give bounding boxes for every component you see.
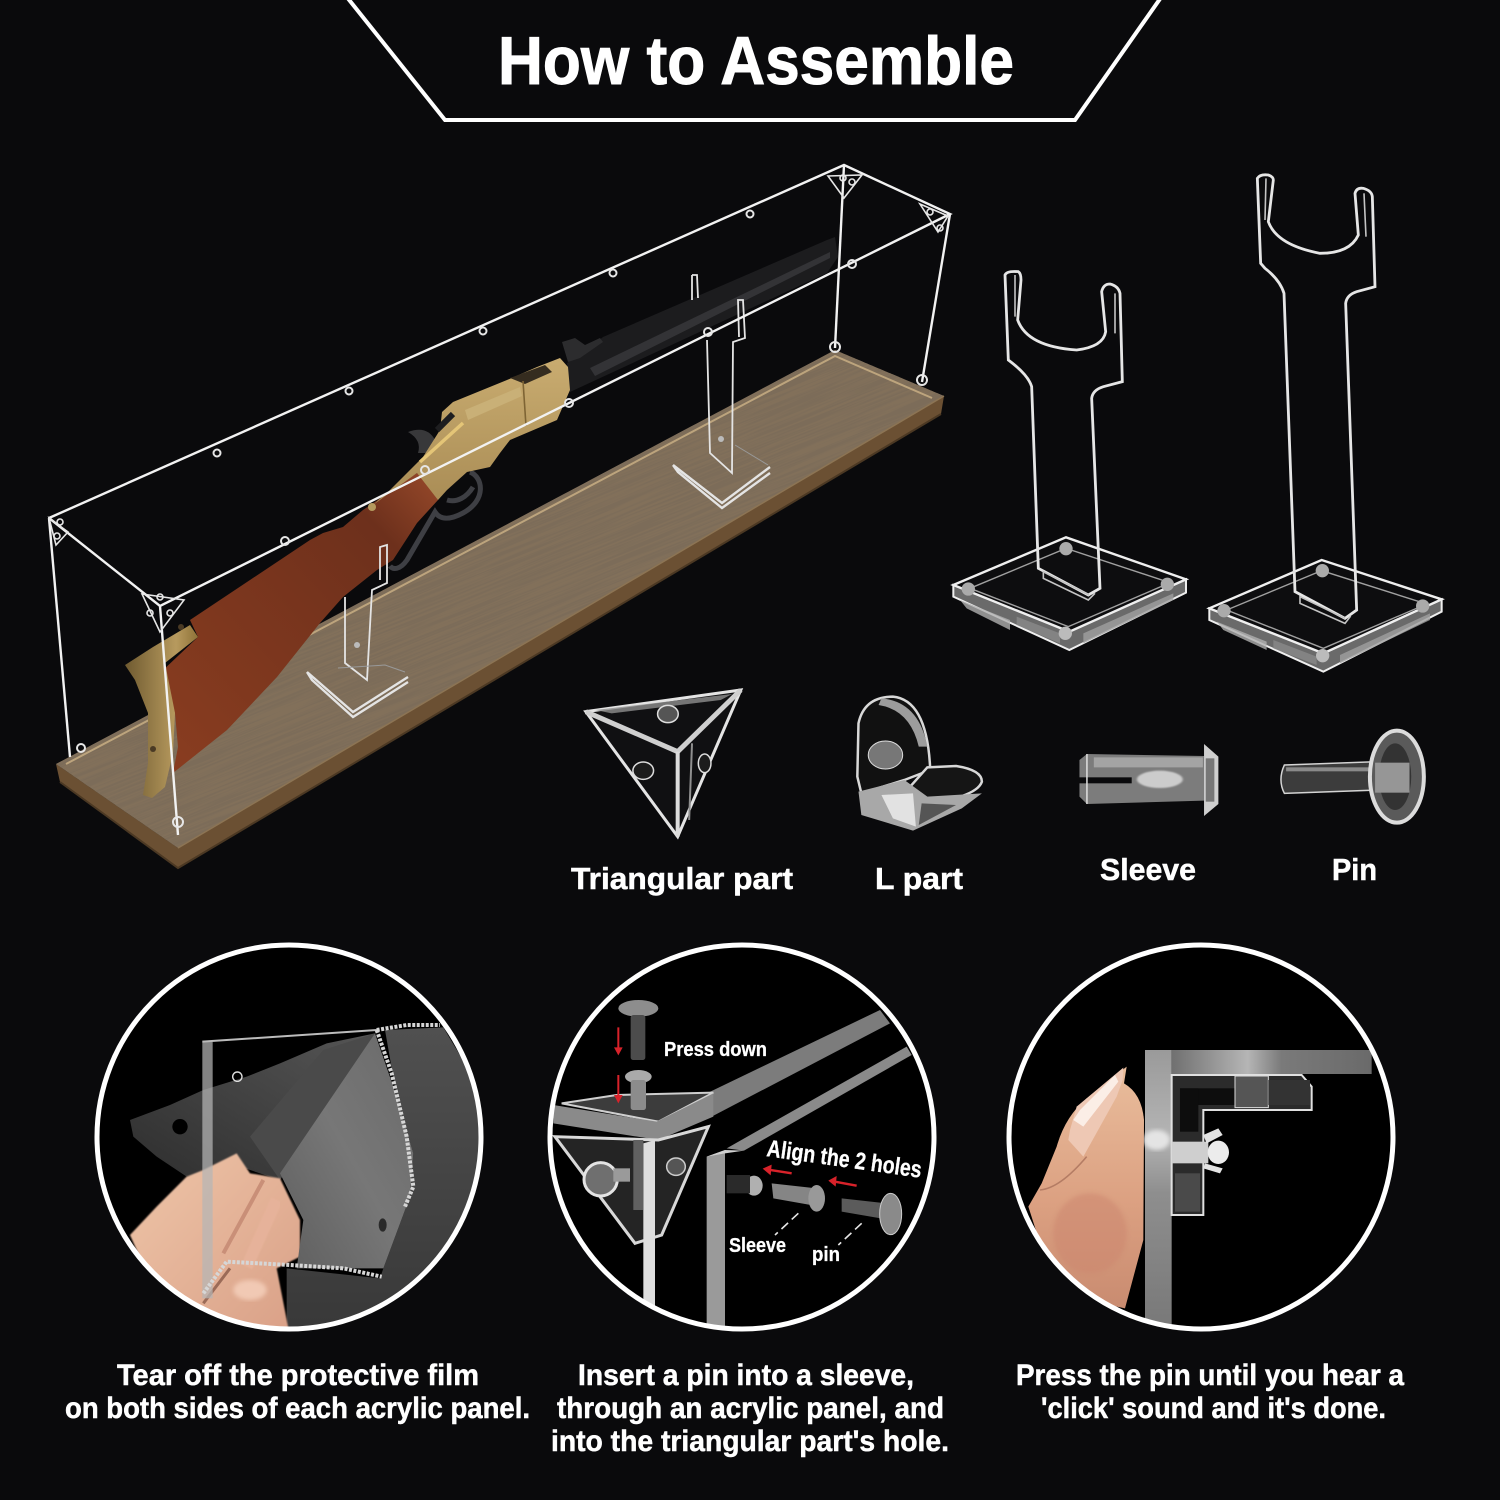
ring bbox=[97, 945, 481, 1329]
base plate bbox=[953, 537, 1186, 650]
ring bbox=[550, 945, 934, 1329]
caption: tear off film: on both sides of each acrylic panel. bbox=[65, 1392, 530, 1425]
circle panel: press pin bbox=[1009, 945, 1393, 1337]
rear sight bbox=[562, 338, 603, 362]
callout: sleeve: Sleeve bbox=[729, 1235, 786, 1257]
upright with fork bbox=[1257, 175, 1375, 618]
acrylic stand front bbox=[307, 545, 408, 717]
caption: press pin bbox=[1016, 1359, 1404, 1425]
hammer bbox=[408, 430, 435, 453]
rifle barrel bbox=[567, 237, 838, 392]
caption: insert pin: into the triangular part's hole. bbox=[551, 1425, 949, 1458]
red arrows bbox=[614, 1027, 857, 1187]
label: sleeve: Sleeve bbox=[1100, 852, 1196, 887]
caption: tear off film bbox=[65, 1359, 530, 1425]
dashed leaders bbox=[775, 1213, 862, 1245]
acrylic corner bbox=[1145, 1050, 1172, 1337]
pins on case bbox=[77, 210, 927, 827]
rifle bbox=[125, 237, 838, 798]
torn edges bbox=[203, 1025, 440, 1293]
wood base bbox=[56, 350, 944, 870]
base plate bbox=[1209, 560, 1442, 672]
holes bbox=[172, 1119, 188, 1134]
brass butt plate bbox=[125, 625, 198, 798]
part: pin bbox=[1281, 731, 1424, 823]
corner post bbox=[643, 1140, 655, 1310]
thumb bbox=[1028, 1067, 1144, 1308]
label: pin: Pin bbox=[1332, 852, 1377, 887]
peeled film bbox=[280, 1033, 413, 1268]
callout: pin: pin bbox=[812, 1244, 840, 1266]
lever bbox=[390, 472, 480, 568]
caption: insert pin: through an acrylic panel, and bbox=[557, 1392, 944, 1425]
triangle pin bbox=[584, 1163, 617, 1196]
small acrylic stand large view bbox=[953, 271, 1186, 650]
title banner bbox=[346, 0, 1162, 120]
caption: tear off film: Tear off the protective film bbox=[117, 1359, 479, 1392]
caption: insert pin bbox=[551, 1359, 949, 1458]
caption: press pin: Press the pin until you hear a bbox=[1016, 1359, 1404, 1392]
wood stock bbox=[160, 473, 438, 773]
acrylic case edges bbox=[49, 165, 950, 835]
banner outline bbox=[346, 0, 1162, 120]
caption: insert pin: Insert a pin into a sleeve, bbox=[578, 1359, 914, 1392]
right film backing bbox=[287, 1027, 487, 1337]
fingernail bbox=[1068, 1068, 1123, 1157]
L bracket bbox=[1172, 1075, 1312, 1215]
display case with rifle bbox=[48, 164, 953, 870]
callout: align holes: Align the 2 holes bbox=[765, 1135, 923, 1184]
top pins bbox=[618, 1000, 658, 1017]
acrylic strip bbox=[202, 1042, 213, 1298]
upright with fork bbox=[1005, 271, 1122, 595]
circle panel: tear off film bbox=[97, 945, 487, 1337]
part: L part bbox=[857, 697, 982, 831]
ring bbox=[1009, 945, 1393, 1329]
label: L part: L part bbox=[875, 861, 963, 896]
back film bbox=[130, 1033, 375, 1180]
horizontal sleeve and pin bbox=[748, 1176, 763, 1196]
part: sleeve bbox=[1075, 744, 1218, 816]
label: triangular part: Triangular part bbox=[571, 861, 793, 896]
acrylic top bands bbox=[707, 1010, 890, 1117]
acrylic stand rear bbox=[673, 275, 770, 508]
top corner triangle bbox=[562, 1093, 713, 1122]
acrylic front post bbox=[707, 1150, 725, 1330]
brass receiver bbox=[373, 358, 570, 505]
caption: press pin: 'click' sound and it's done. bbox=[1041, 1392, 1386, 1425]
title: How to Assemble bbox=[498, 23, 1014, 99]
pin in bracket bbox=[1172, 1128, 1229, 1173]
lower triangle bracket bbox=[555, 1127, 708, 1243]
part: triangular part bbox=[586, 690, 741, 837]
circle panel: insert pin bbox=[550, 945, 934, 1330]
fingers bbox=[130, 1153, 300, 1337]
corner triangle brackets bbox=[49, 175, 948, 632]
tall acrylic stand large view bbox=[1209, 175, 1442, 672]
callout: press down: Press down bbox=[664, 1039, 767, 1061]
